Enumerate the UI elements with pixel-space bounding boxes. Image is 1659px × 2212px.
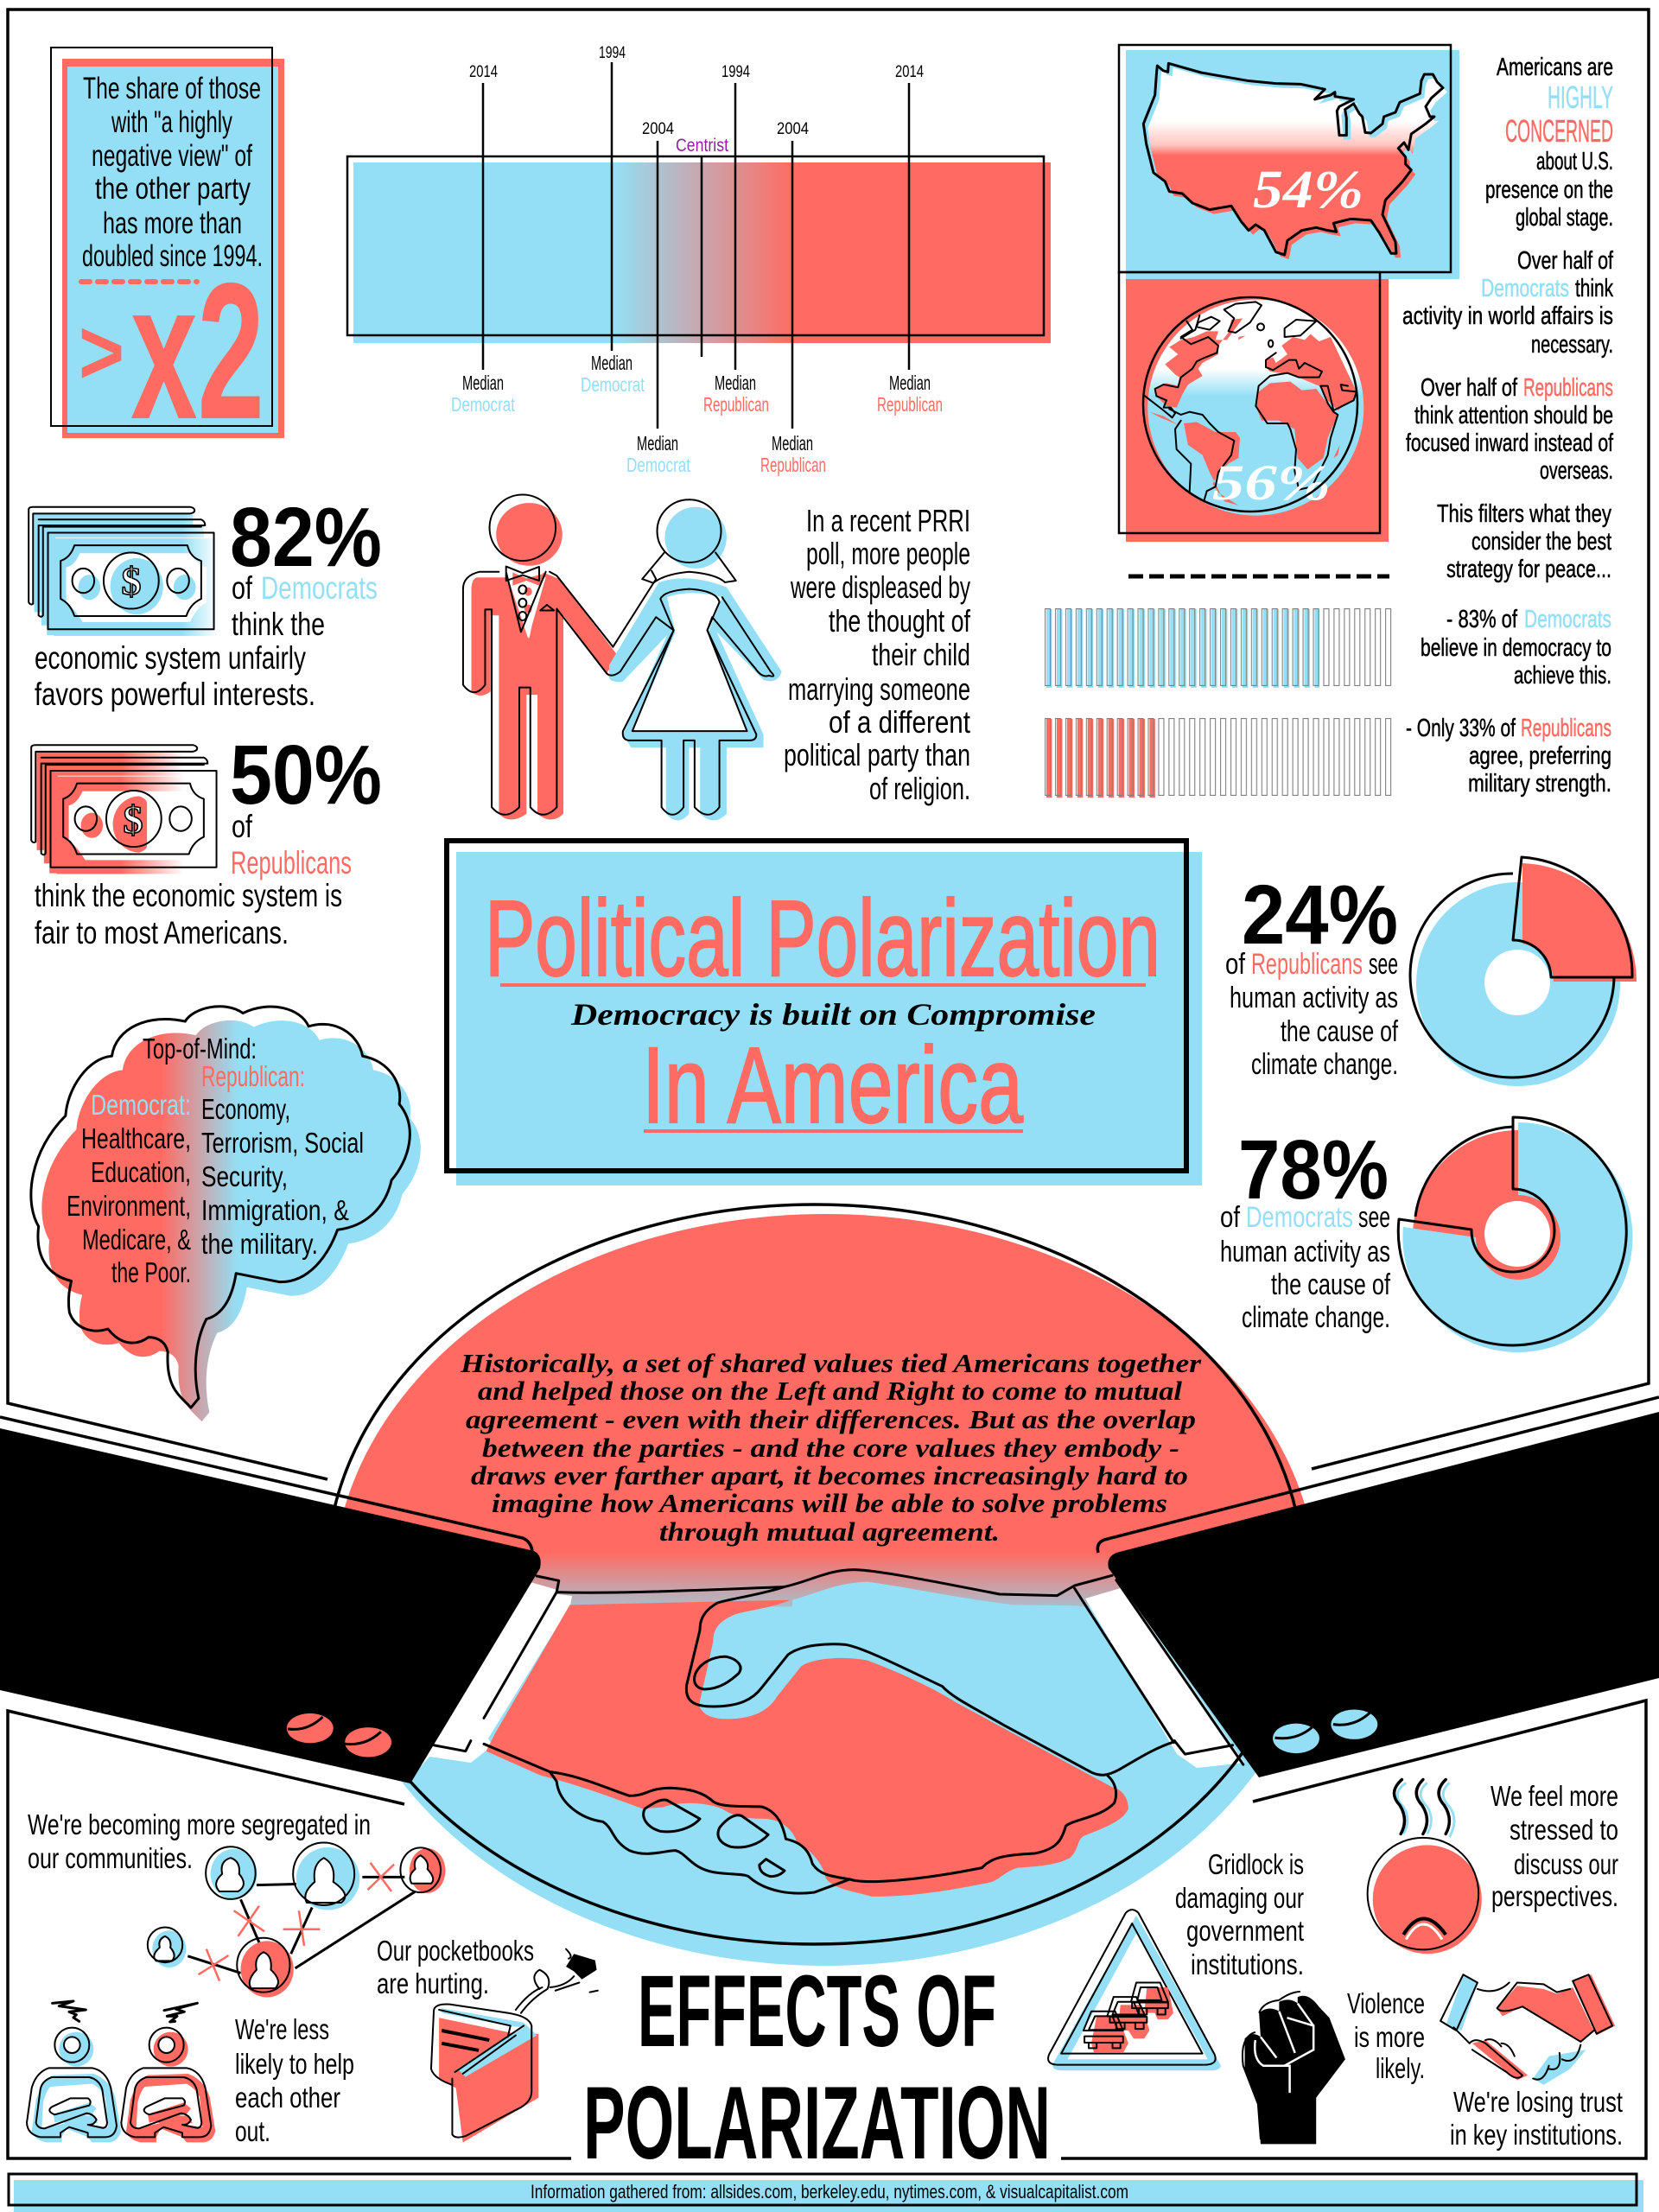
text block: PRRI poll: political party than [784,737,970,772]
icon: dollar bills blue: $ [121,559,142,603]
panel: doubled negative view: doubled since 1994. [82,239,263,273]
panel: doubled negative view: x2 [130,242,264,460]
stat: 78% of Democrats [1220,1122,1390,1334]
effect: stress text [1491,1780,1618,1912]
chart: ideological spectrum bar: 2004 [777,120,809,138]
panel: title [447,841,1202,1185]
divider dashes [1128,574,1389,579]
callout: top of mind speech bubble: Republican: [201,1060,305,1092]
effect: gridlock text: damaging our [1175,1882,1304,1914]
text block: historically: and helped those on the Left and Right to come to mutual [478,1376,1182,1406]
chart: ideological spectrum bar: Median [591,352,632,374]
effect: violence text: Violence [1347,1987,1425,2019]
icon: dollar bills red [31,745,222,874]
illustration: right sleeve [1097,1397,1659,1777]
text block: PRRI poll: poll, more people [806,536,970,571]
effect: gridlock text [1175,1848,1304,1980]
upper page frame [8,10,1649,1479]
callout: top of mind speech bubble: Education, [91,1156,191,1188]
text block: Americans highly concerned [1402,54,1614,583]
effect: pocketbooks text [377,1935,534,1999]
panel: globe 56% [1119,272,1389,542]
chart: ideological spectrum bar: Median [715,372,756,394]
stat: 24% of Republicans: Republicans [1251,948,1363,981]
panel: title: Democracy is built on Compromise [570,997,1096,1032]
chart: ideological spectrum bar: 2014 [895,63,924,81]
stat: 78% of Democrats: Democrats [1246,1201,1353,1234]
effect: stress text: We feel more [1491,1780,1618,1812]
text block: PRRI poll: of religion. [869,771,970,806]
icon: stressed head [1368,1780,1482,1954]
text block: PRRI poll: of a different [829,704,970,740]
footer source bar: Information gathered from: allsides.com, berkeley.edu, nytimes.com, & visualcapitalist.com [531,2181,1128,2202]
icon: two people crossing arms [27,2001,215,2142]
panel: US map 54% [1119,45,1459,279]
stat: 50% of Republicans: think the economic system is [35,878,342,913]
effect: less likely to help text: out. [235,2115,270,2147]
text block: historically: Historically, a set of shared values tied Americans together [460,1348,1202,1378]
effect: segregated communities text: our communities. [28,1842,193,1874]
effect: segregated communities text [28,1808,371,1874]
chart: ideological spectrum bar: Median [889,372,931,394]
footer source bar [9,2174,1643,2212]
effect: stress text: discuss our [1514,1848,1618,1880]
effect: less likely to help text: likely to help [235,2048,354,2080]
lower page frame [8,1700,1646,2158]
stat: 78% of Democrats: of [1220,1201,1240,1234]
heading: effects of polarization: EFFECTS OF [638,1955,996,2069]
text block: historically [460,1348,1202,1547]
callout: top of mind speech bubble: Immigration, & [201,1194,349,1226]
callout: top of mind speech bubble: the military. [201,1228,318,1260]
effect: pocketbooks text: are hurting. [377,1967,489,1999]
text block: PRRI poll: marrying someone [788,671,970,707]
icon: couple holding hands [463,495,782,820]
text block: PRRI poll: were displeased by [790,569,970,605]
stat: 82% of Democrats: of [232,570,253,606]
icon: small handshake [1440,1974,1615,2085]
illustration: handshake in circle [327,1205,1318,1966]
stat: 50% of Republicans: Republicans [231,845,352,880]
chart: ideological spectrum bar: Median [462,372,504,394]
text block: Americans highly concerned: about U.S. [1536,148,1613,175]
chart: ideological spectrum bar: 2004 [642,120,674,138]
stat: 50% of Republicans: of [232,809,253,844]
stat: 82% of Democrats: think the [232,607,325,642]
chart: 83% of Democrats pictogram: achieve this. [1514,662,1611,690]
effect: less likely to help text: We're less [235,2013,329,2045]
stat: 24% of Republicans [1225,868,1398,1081]
text block: PRRI poll: the thought of [829,603,971,639]
panel: doubled negative view: the other party [95,172,251,206]
stat: 24% of Republicans: climate change. [1251,1048,1398,1081]
text block: Americans highly concerned: HIGHLY [1548,79,1613,115]
stat: 82% of Democrats [35,490,382,712]
chart: 83% of Democrats pictogram [1045,606,1611,690]
panel: doubled negative view: The share of those [83,72,261,105]
panel: title: Political Polarization [485,879,1160,999]
stat: 50% of Republicans [35,728,382,950]
chart: ideological spectrum bar: Centrist [676,136,728,156]
panel: doubled negative view: with "a highly [111,105,232,139]
panel: globe 56%: 56% [1212,454,1331,511]
callout: top of mind speech bubble: Healthcare, [81,1122,191,1154]
effect: less likely to help text: each other [235,2082,340,2113]
stat: 78% of Democrats: see [1358,1201,1390,1234]
effect: less likely to help text [235,2013,354,2147]
chart: 33% of Republicans pictogram: agree, preferring [1469,742,1611,770]
stat: 82% of Democrats: economic system unfairly [35,640,306,676]
stat: 24% of Republicans: the cause of [1281,1015,1398,1048]
callout: top of mind speech bubble: Democrat: [91,1089,191,1121]
icon: broken community network [148,1842,445,1998]
chart: ideological spectrum bar: 2014 [469,63,498,81]
callout: top of mind speech bubble: Medicare, & [82,1224,191,1255]
text block: PRRI poll [784,503,971,806]
text block: Americans highly concerned: think [1575,275,1613,302]
callout: top of mind speech bubble: the Poor. [111,1256,191,1288]
callout: top of mind speech bubble: Environment, [67,1190,191,1222]
chart: ideological spectrum bar: Republican [703,393,769,416]
chart: 33% of Republicans pictogram: - Only 33% of [1406,715,1516,742]
icon: wallet with moth [431,1949,598,2143]
text block: Americans highly concerned: Over half of [1421,374,1518,402]
chart: 83% of Democrats pictogram: Democrats [1524,606,1611,633]
chart: ideological spectrum bar: Democrat [451,393,515,416]
panel: US map 54%: 54% [1253,161,1363,219]
chart: donut 78% [1398,1117,1632,1352]
stat: 50% of Republicans: fair to most Americans. [35,915,289,950]
text block: Americans highly concerned: Republicans [1523,374,1613,402]
effect: losing trust text [1450,2086,1623,2151]
effect: stress text: stressed to [1510,1814,1618,1846]
effect: violence text: is more [1354,2021,1425,2053]
chart: ideological spectrum bar: Democrat [626,454,690,476]
effect: segregated communities text: We're becoming more segregated in [28,1808,371,1840]
chart: ideological spectrum bar: Democrat [581,373,645,396]
panel: doubled negative view: > [79,300,124,404]
callout: top of mind speech bubble: Terrorism, Social [201,1127,364,1159]
callout: top of mind speech bubble [31,1007,421,1421]
effect: gridlock text: institutions. [1191,1948,1304,1980]
text block: Americans highly concerned: Democrats [1481,275,1569,302]
chart: 33% of Republicans pictogram [1045,715,1611,798]
heading: effects of polarization [583,1955,1051,2181]
icon: traffic warning triangle [1048,1910,1221,2070]
effect: gridlock text: government [1186,1915,1304,1947]
text block: Americans highly concerned: Americans are [1497,54,1613,81]
effect: violence text [1347,1987,1425,2084]
panel: title: In America [642,1026,1023,1146]
chart: ideological spectrum bar [347,44,1051,476]
text block: PRRI poll: In a recent PRRI [806,503,970,538]
text block: historically: agreement - even with their differences. But as the overlap [466,1404,1196,1434]
stat: 82% of Democrats: 82% [230,490,382,584]
illustration: left sleeve [0,1417,541,1783]
effect: violence text: likely. [1376,2052,1425,2084]
stat: 24% of Republicans: of [1225,948,1245,981]
stat: 78% of Democrats: 78% [1238,1122,1389,1217]
text block: historically: imagine how Americans will be able to solve problems [492,1488,1167,1518]
stat: 78% of Democrats: climate change. [1242,1301,1390,1334]
stat: 24% of Republicans: see [1369,948,1398,981]
stat: 78% of Democrats: the cause of [1271,1268,1390,1301]
callout: top of mind speech bubble: Economy, [201,1093,290,1125]
icon: dollar bills red: $ [123,798,143,842]
chart: ideological spectrum bar: Republican [877,393,943,416]
effect: pocketbooks text: Our pocketbooks [377,1935,534,1967]
icon: raised fist [1243,1992,1345,2144]
text block: Americans highly concerned: global stage. [1516,204,1613,232]
stat: 24% of Republicans: human activity as [1230,982,1398,1014]
effect: gridlock text: Gridlock is [1208,1848,1304,1880]
callout: top of mind speech bubble: Top-of-Mind: [143,1033,257,1065]
chart: ideological spectrum bar: Republican [760,454,826,476]
text block: historically: between the parties - and the core values they embody - [482,1433,1179,1463]
panel: doubled negative view: negative view" of [92,139,252,173]
panel: doubled negative view: has more than [103,207,242,240]
stat: 82% of Democrats: Democrats [261,570,378,606]
chart: 33% of Republicans pictogram: military strength. [1468,770,1611,798]
text block: historically: draws ever farther apart, it becomes increasingly hard to [471,1460,1188,1491]
chart: ideological spectrum bar: Median [637,432,678,454]
chart: ideological spectrum bar: 1994 [599,44,626,62]
callout: top of mind speech bubble: Security, [201,1160,288,1192]
text block: PRRI poll: their child [872,637,970,672]
text block: Americans highly concerned: This filters what they [1437,500,1611,528]
heading: effects of polarization: POLARIZATION [583,2065,1051,2181]
chart: 33% of Republicans pictogram: Republicans [1521,715,1611,742]
chart: ideological spectrum bar: 1994 [721,63,750,81]
text block: historically: through mutual agreement. [659,1516,1000,1547]
chart: 83% of Democrats pictogram: - 83% of [1446,606,1518,633]
text block: Americans highly concerned: Over half of [1517,247,1614,275]
text block: Americans highly concerned: necessary. [1531,331,1613,359]
text block: Americans highly concerned: consider the best [1471,528,1611,556]
effect: stress text: perspectives. [1491,1880,1618,1912]
stat: 82% of Democrats: favors powerful interests. [35,677,315,712]
stat: 50% of Republicans: 50% [230,728,382,822]
chart: donut 24% [1410,857,1637,1086]
icon: dollar bills blue [29,507,219,636]
chart: ideological spectrum bar: Median [772,432,813,454]
stat: 78% of Democrats: human activity as [1220,1236,1390,1268]
text block: Americans highly concerned: overseas. [1540,457,1613,485]
stat: 24% of Republicans: 24% [1242,868,1398,962]
panel: doubled negative view [51,48,284,460]
